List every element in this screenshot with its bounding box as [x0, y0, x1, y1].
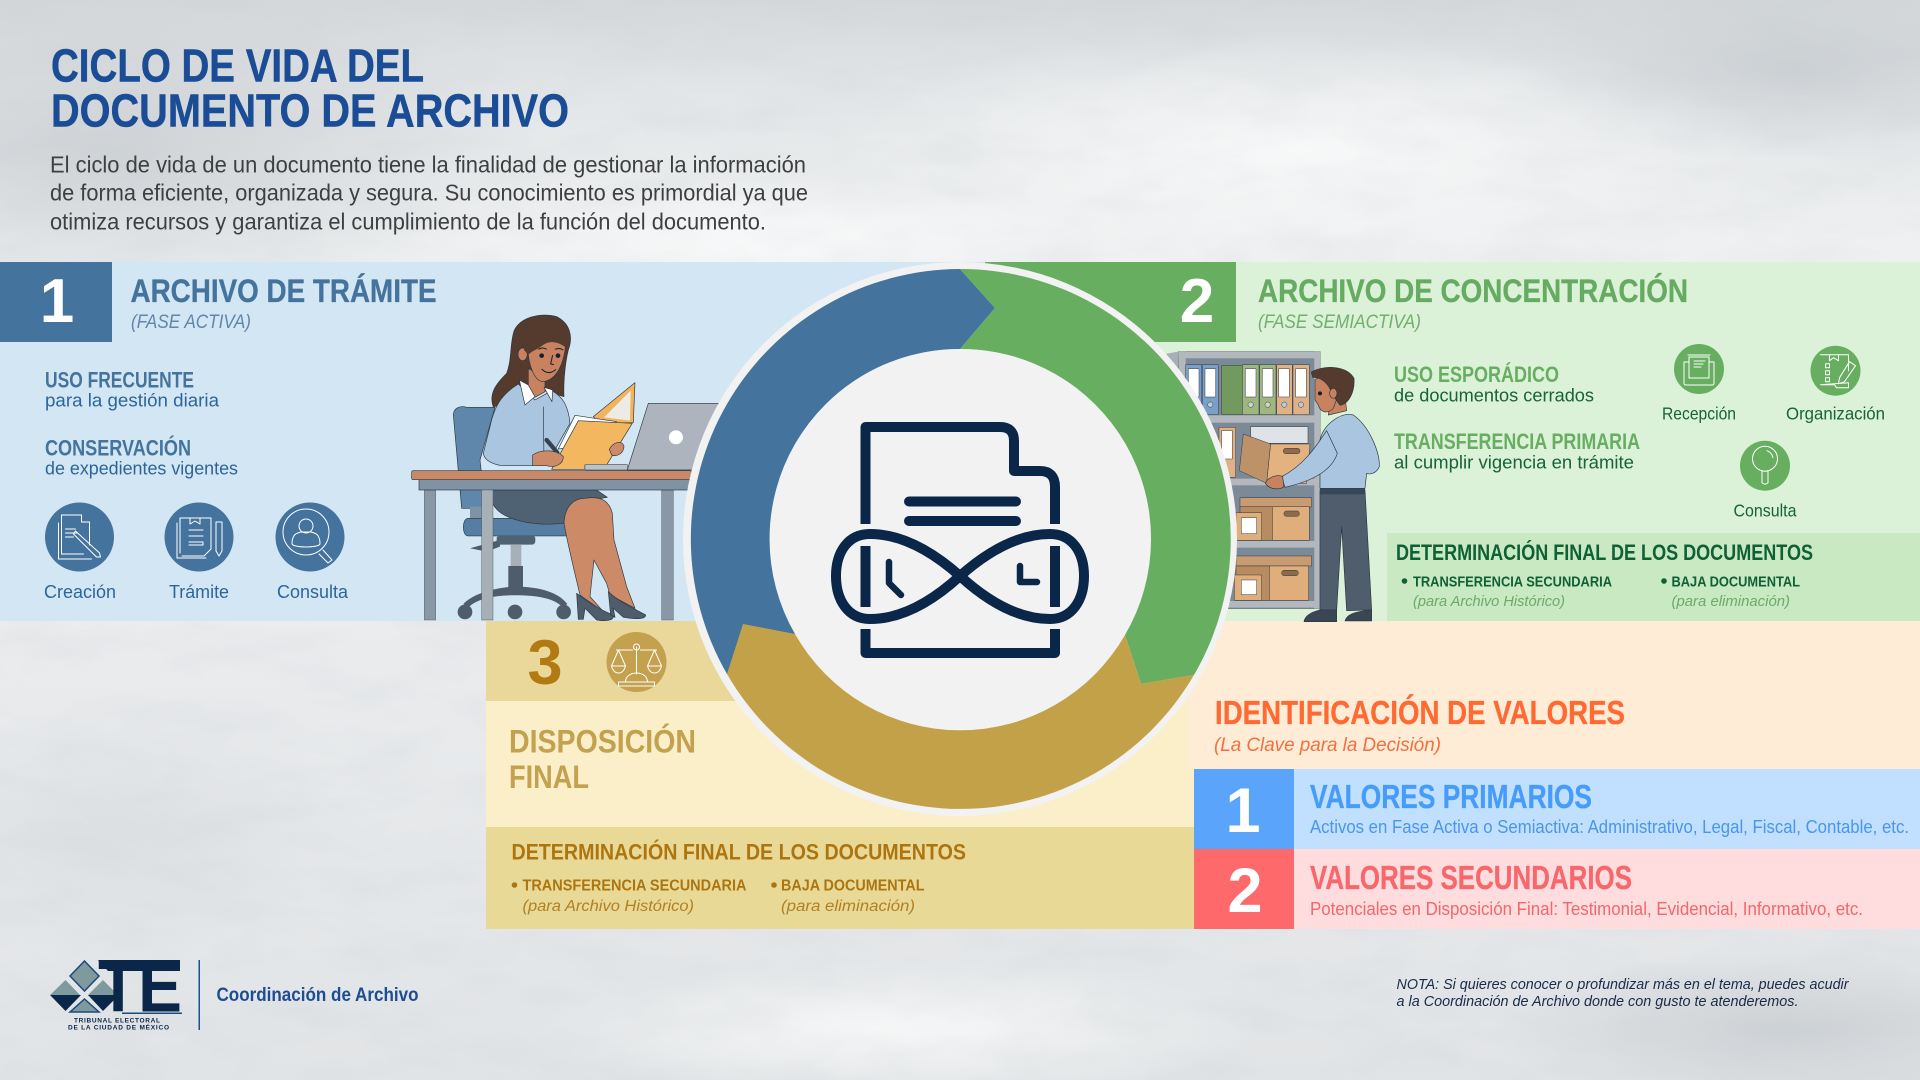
segment: green semiactive phase — [960, 269, 1231, 684]
row: valores secundarios — [1194, 849, 1920, 929]
panel: determinación final green: (para Archivo Histórico) — [1413, 593, 1565, 610]
number 3: 3 — [527, 628, 563, 698]
number 1 box: 1 — [40, 267, 74, 336]
heading: identificación de valores: IDENTIFICACIÓN DE VALORES — [1215, 694, 1625, 731]
panel: archivo de concentración background — [1100, 262, 1920, 621]
label: consulta: Consulta — [277, 581, 349, 602]
logo: Tribunal Electoral — [50, 946, 182, 1032]
heading: archivo de trámite: ARCHIVO DE TRÁMITE — [130, 273, 436, 309]
heading: archivo de trámite: (FASE ACTIVA) — [131, 312, 251, 333]
heading: disposición final: FINAL — [509, 759, 589, 795]
row: valores primarios — [1194, 769, 1920, 849]
logo: Tribunal Electoral: DE LA CIUDAD DE MÉXICO — [68, 1022, 169, 1032]
text block: determinación final gold: TRANSFERENCIA SECUNDARIA — [522, 878, 746, 894]
text block: uso frecuente — [45, 368, 220, 410]
panel: determinación final green: DETERMINACIÓN FINAL DE LOS DOCUMENTOS — [1396, 540, 1813, 565]
row: valores secundarios: VALORES SECUNDARIOS — [1310, 859, 1632, 896]
text block: uso esporádico — [1394, 362, 1594, 406]
icon: organización — [1810, 346, 1860, 396]
illustration: man at shelving — [1165, 352, 1379, 622]
footnote — [1396, 976, 1849, 1010]
footnote: NOTA: Si quieres conocer o profundizar más en el tema, puedes acudir — [1396, 976, 1849, 993]
logo: Tribunal Electoral: TRIBUNAL ELECTORAL — [74, 1018, 160, 1024]
text block: determinación final gold: DETERMINACIÓN FINAL DE LOS DOCUMENTOS — [512, 840, 966, 864]
icon: consulta — [276, 502, 344, 572]
intro paragraph — [50, 152, 808, 234]
label: recepción: Recepción — [1662, 404, 1736, 424]
footer: coordinación de archivo: Coordinación de Archivo — [216, 985, 418, 1006]
illustration: woman at desk — [412, 315, 720, 621]
ring border — [683, 262, 1237, 816]
icon: consulta magnifier — [1740, 441, 1790, 491]
text block: determinación final gold — [512, 840, 966, 915]
centre disc — [770, 349, 1150, 729]
text block: uso frecuente: USO FRECUENTE — [45, 368, 194, 392]
label: trámite: Trámite — [169, 581, 229, 602]
heading: archivo de concentración: (FASE SEMIACTIVA) — [1258, 312, 1421, 333]
panel: determinación final green: BAJA DOCUMENTAL — [1672, 574, 1800, 590]
heading: identificación de valores: (La Clave para la Decisión) — [1214, 734, 1441, 756]
title: DOCUMENTO DE ARCHIVO — [51, 84, 569, 136]
text block: conservación — [45, 436, 238, 478]
row: valores primarios: 1 — [1225, 776, 1261, 846]
panel: archivo de trámite background — [0, 262, 990, 621]
panel: determinación final green — [1387, 533, 1920, 621]
heading: disposición final — [509, 724, 696, 795]
chart: cycle ring — [683, 262, 1237, 816]
text block: uso esporádico: de documentos cerrados — [1394, 386, 1594, 406]
title — [51, 40, 569, 136]
number 1 box — [0, 262, 112, 342]
icon: document with infinity and clocks — [836, 427, 1084, 653]
text block: determinación final gold: BAJA DOCUMENTAL — [781, 878, 924, 894]
heading: identificación de valores — [1214, 694, 1625, 756]
footer divider — [198, 960, 200, 1030]
intro paragraph: El ciclo de vida de un documento tiene la finalidad de gestionar la información — [50, 152, 806, 178]
heading: archivo de concentración: 2 — [1180, 267, 1214, 336]
heading: archivo de concentración — [1180, 267, 1688, 336]
text block: conservación: de expedientes vigentes — [45, 458, 238, 478]
row: valores secundarios: Potenciales en Disposición Final: Testimonial, Evidencial, Informativo, etc. — [1310, 898, 1863, 919]
title: CICLO DE VIDA DEL — [51, 40, 424, 92]
label: creación: Creación — [44, 581, 116, 602]
text block: transferencia primaria — [1394, 429, 1640, 472]
row: valores primarios: VALORES PRIMARIOS — [1310, 778, 1592, 815]
heading: disposición final: DISPOSICIÓN — [509, 724, 696, 760]
label: organización: Organización — [1786, 404, 1885, 424]
intro paragraph: de forma eficiente, organizada y segura. Su conocimiento es primordial ya que — [50, 180, 808, 206]
heading: archivo de concentración: ARCHIVO DE CONCENTRACIÓN — [1258, 273, 1688, 309]
segment: blue active phase — [691, 269, 995, 674]
icon: recepción — [1674, 344, 1724, 394]
segment: gold final disposition — [727, 624, 1194, 809]
text block: transferencia primaria: TRANSFERENCIA PRIMARIA — [1394, 429, 1640, 454]
row: valores secundarios: 2 — [1227, 856, 1263, 926]
intro paragraph: otimiza recursos y garantiza el cumplimiento de la función del documento. — [50, 208, 766, 234]
icon: trámite — [164, 502, 234, 572]
text block: uso esporádico: USO ESPORÁDICO — [1394, 362, 1559, 387]
panel: disposición final — [486, 621, 1194, 929]
text block: conservación: CONSERVACIÓN — [45, 436, 191, 460]
text block: uso frecuente: para la gestión diaria — [45, 390, 220, 410]
icon: creación — [45, 502, 114, 572]
text block: determinación final gold: (para eliminación) — [781, 898, 915, 915]
icon: scales — [606, 632, 666, 692]
number box 2 band — [985, 262, 1236, 342]
heading: archivo de trámite — [130, 273, 436, 333]
panel: determinación final green: TRANSFERENCIA SECUNDARIA — [1413, 574, 1612, 590]
text block: transferencia primaria: al cumplir vigencia en trámite — [1394, 452, 1634, 472]
text block: determinación final gold: (para Archivo Histórico) — [522, 898, 694, 915]
panel: determinación final green: (para eliminación) — [1672, 593, 1790, 610]
label: consulta: Consulta — [1734, 500, 1797, 520]
footnote: a la Coordinación de Archivo donde con gusto te atenderemos. — [1396, 993, 1798, 1010]
panel: identificación de valores background — [1150, 621, 1920, 769]
logo: Tribunal Electoral: TE — [98, 946, 182, 1028]
